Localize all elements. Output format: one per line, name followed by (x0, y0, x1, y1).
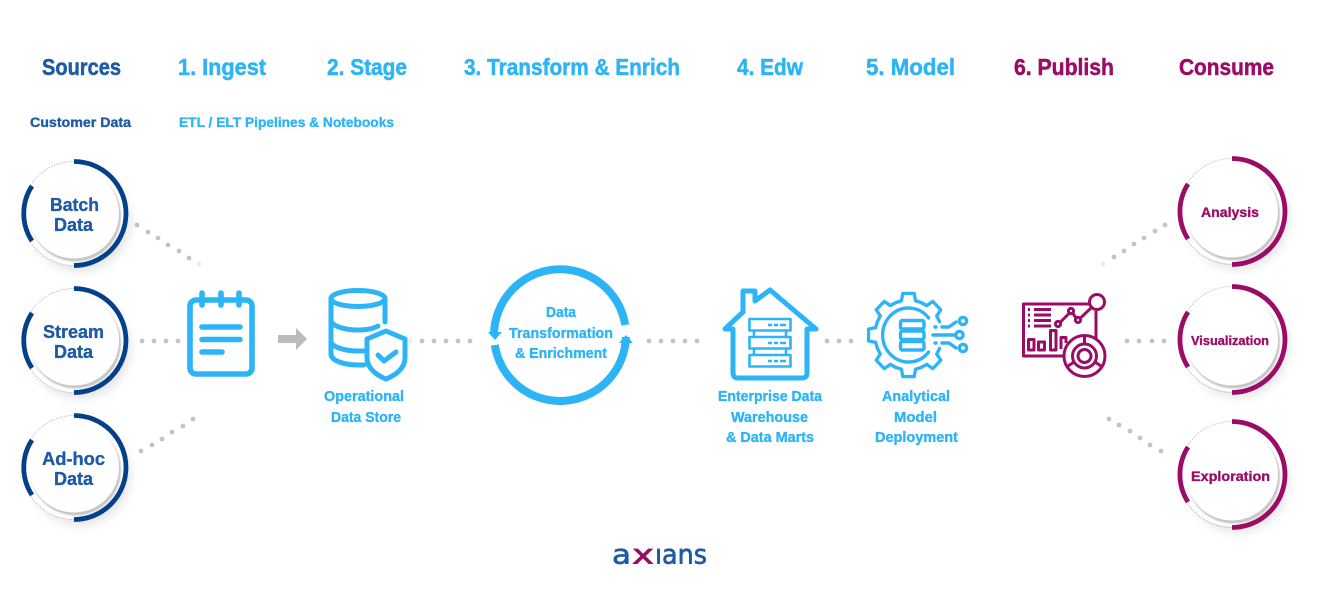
source: Ad-hoc Data: Data (54, 469, 94, 489)
icon: gear with server and circuit (869, 293, 967, 377)
consume: Analysis (1179, 158, 1288, 269)
heading: Consume: Consume (1179, 54, 1274, 80)
icon: data warehouse house (725, 290, 816, 378)
logo: axians: ians (655, 540, 707, 570)
logo: axians: a (612, 540, 631, 570)
consume: Analysis: Analysis (1201, 204, 1259, 220)
label: Analytical Model Deployment (875, 389, 958, 446)
icon: database with shield (331, 290, 405, 379)
heading: 2. Stage: 2. Stage (327, 54, 407, 80)
icon: transformation cycle: & Enrichment (515, 346, 607, 362)
label: Analytical Model Deployment: Deployment (875, 430, 958, 446)
source: Stream Data (22, 288, 130, 398)
label: Enterprise Data Warehouse & Data Marts (718, 389, 823, 446)
heading: Sources: Sources (42, 54, 121, 80)
label: Enterprise Data Warehouse & Data Marts: Warehouse (731, 410, 808, 426)
subheading: Customer Data: Customer Data (30, 114, 131, 130)
heading row (42, 54, 1274, 80)
source: Stream Data: Data (54, 342, 94, 362)
icon: transformation cycle: Data (546, 305, 577, 321)
subheading: ETL / ELT Pipelines & Notebooks: ETL / ELT Pipelines & Notebooks (179, 114, 394, 130)
icon: notepad (190, 293, 252, 374)
icon: transformation cycle (488, 269, 633, 401)
heading: 4. Edw: 4. Edw (737, 54, 803, 80)
icon: transformation cycle: Transformation (509, 326, 613, 342)
heading: 5. Model: 5. Model (866, 54, 955, 80)
consume: Exploration (1179, 422, 1288, 532)
heading: 6. Publish: 6. Publish (1014, 54, 1114, 80)
label: Analytical Model Deployment: Analytical (882, 389, 950, 405)
label: Operational Data Store: Data Store (331, 410, 401, 426)
consume: Exploration: Exploration (1191, 468, 1270, 484)
consume: Visualization (1179, 286, 1288, 397)
heading: 1. Ingest: 1. Ingest (178, 54, 266, 80)
consume: Visualization: Visualization (1191, 333, 1269, 348)
icon: publish dashboard (1024, 294, 1105, 376)
source: Ad-hoc Data (22, 416, 130, 525)
label: Enterprise Data Warehouse & Data Marts: & Data Marts (726, 430, 814, 446)
source: Batch Data: Batch (50, 195, 99, 215)
logo: axians (614, 548, 706, 564)
label: Operational Data Store: Operational (324, 389, 404, 405)
heading: 3. Transform & Enrich: 3. Transform & Enrich (464, 54, 680, 80)
logo: axians: x (632, 540, 654, 570)
label: Analytical Model Deployment: Model (894, 410, 937, 426)
source: Batch Data (22, 162, 130, 271)
label: Operational Data Store (324, 389, 404, 426)
source: Stream Data: Stream (43, 322, 104, 342)
dotted connectors (135, 223, 1167, 453)
label: Enterprise Data Warehouse & Data Marts: Enterprise Data (718, 389, 823, 405)
source: Ad-hoc Data: Ad-hoc (42, 449, 105, 469)
arrow: ingest to stage (278, 328, 307, 350)
source: Batch Data: Data (54, 215, 94, 235)
